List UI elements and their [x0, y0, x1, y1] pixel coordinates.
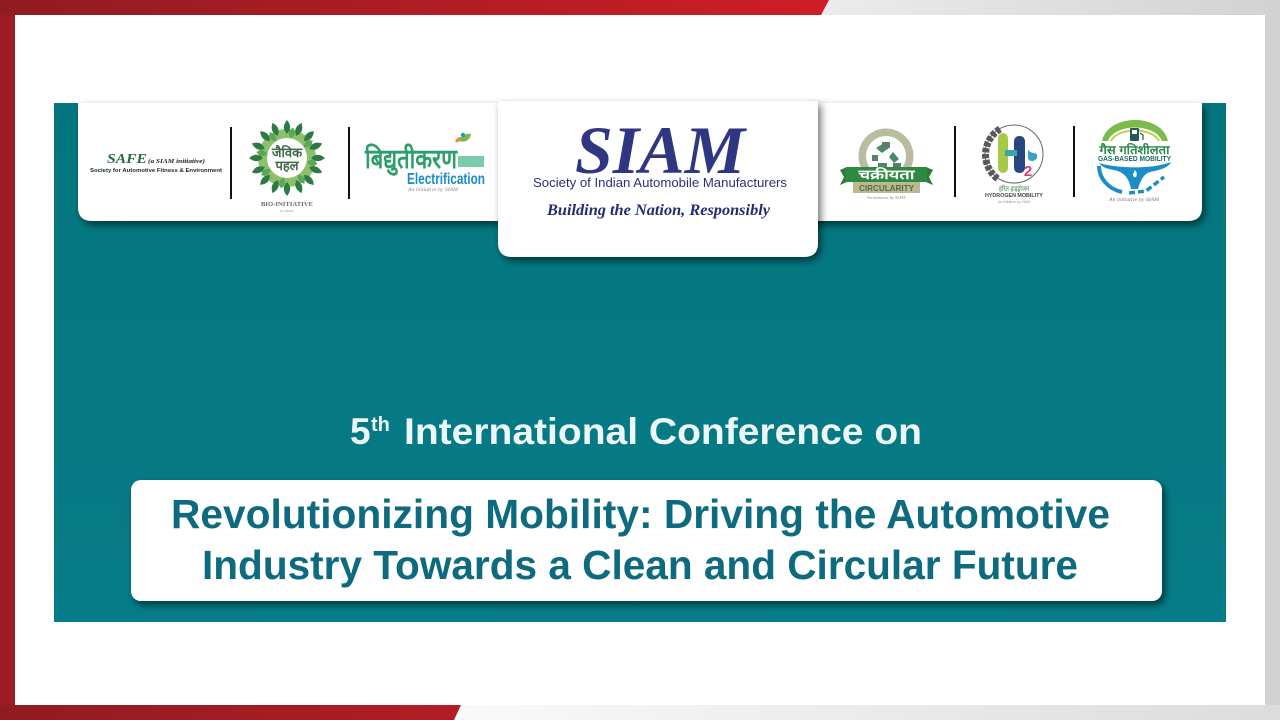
- logo: electrification: Electrification: [407, 171, 485, 188]
- logo: bio-initiative: BIO-INITIATIVE: [261, 202, 313, 208]
- logo: gas-based mobility: An initiative by SIAM: [1108, 198, 1160, 203]
- divider: [348, 127, 350, 199]
- logo: electrification: बिद्युतीकरण: [364, 143, 458, 176]
- logo strip: left panel: [78, 103, 510, 221]
- logo: SAFE: (a SIAM initiative): [148, 158, 205, 165]
- logo: electrification: An initiative by SIAM: [407, 188, 459, 193]
- logo: hydrogen: An initiative by SIAM: [998, 200, 1030, 204]
- logo: bio-initiative: जैविक: [271, 145, 303, 160]
- logo strip: right panel: [800, 103, 1202, 221]
- divider: [230, 127, 232, 199]
- logo: circularity: चक्रीयता: [857, 167, 915, 182]
- logo: hydrogen: 2: [1024, 163, 1032, 180]
- title card: [131, 480, 1162, 601]
- SIAM wordmark: SIAM: [575, 112, 748, 188]
- title line 2: Industry Towards a Clean and Circular Future: [202, 542, 1078, 588]
- logo: SAFE: Society for Automotive Fitness & Environment: [90, 168, 222, 174]
- logo: SAFE: [90, 152, 222, 174]
- logo: SAFE: SAFE: [107, 152, 147, 167]
- conference heading: International Conference on: [404, 411, 922, 452]
- conference heading: th: [371, 414, 390, 436]
- logo: hydrogen: HYDROGEN MOBILITY: [985, 193, 1044, 199]
- logo: gas-based mobility: गैस गतिशीलता: [1098, 143, 1170, 157]
- conference heading: 5: [350, 411, 371, 452]
- logo: circularity: An initiative by SIAM: [866, 195, 906, 200]
- logo: gas-based mobility: GAS-BASED MOBILITY: [1098, 156, 1171, 163]
- logo: bio-initiative: [249, 120, 325, 213]
- logo: hydrogen: हरित हाइड्रोजन: [999, 184, 1029, 193]
- logo: hydrogen: [985, 125, 1044, 204]
- teal background panel: [54, 103, 1226, 622]
- logo: bio-initiative: पहल: [274, 158, 300, 173]
- logo: circularity: [840, 128, 933, 200]
- divider: [954, 126, 956, 197]
- centre SIAM logo card: [498, 101, 818, 257]
- logo: circularity: CIRCULARITY: [859, 183, 914, 193]
- logo: electrification: [364, 133, 485, 193]
- logo: bio-initiative: by SIAM: [280, 209, 294, 213]
- divider: [1073, 126, 1075, 197]
- SIAM full name: Society of Indian Automobile Manufacturers: [533, 175, 787, 190]
- title line 1: Revolutionizing Mobility: Driving the Automotive: [171, 491, 1110, 537]
- SIAM tagline: Building the Nation, Responsibly: [546, 202, 771, 219]
- logo: gas-based mobility: [1098, 120, 1171, 203]
